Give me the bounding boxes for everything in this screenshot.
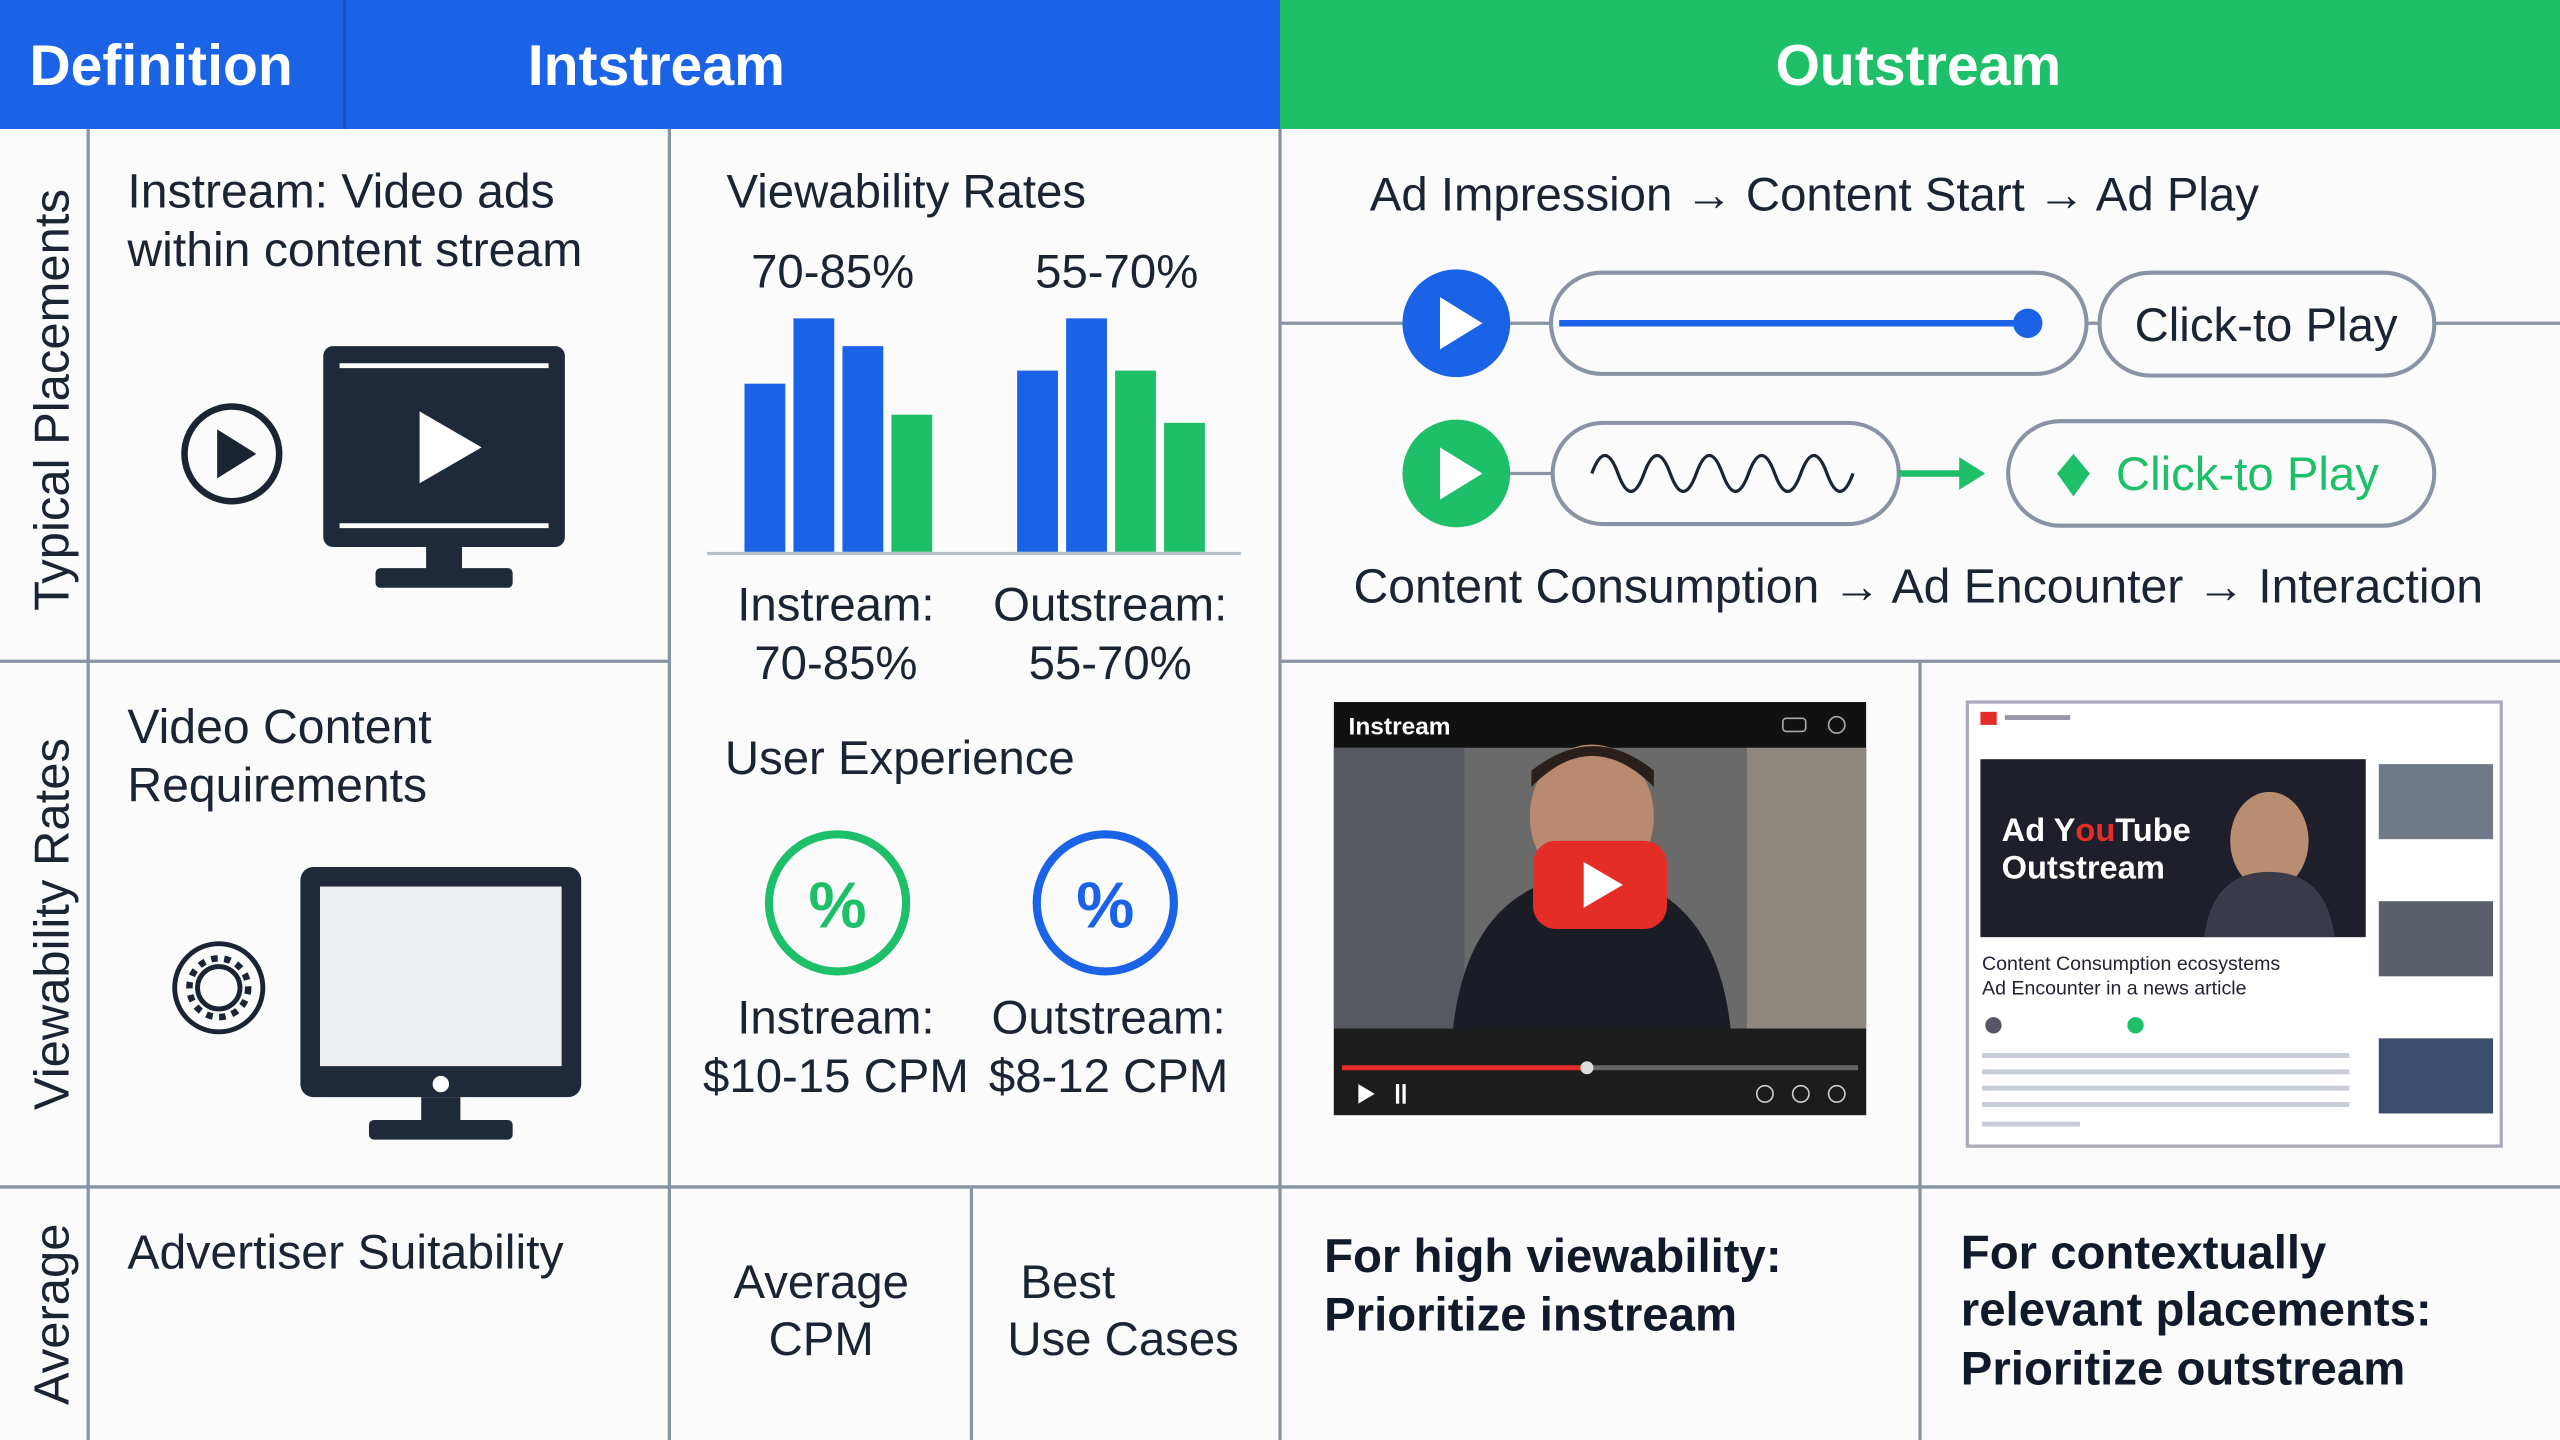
icon: monitor with play (323, 346, 565, 588)
row label: typical placements: Typical Placements (26, 189, 80, 611)
icon: green percent (769, 834, 906, 971)
flow diagram: outstream (1402, 420, 2434, 527)
row label: average: Average (26, 1224, 80, 1405)
mockup: outstream news page: Content Consumption ecosystems (1982, 953, 2280, 975)
text: instream definition: within content stream (126, 223, 582, 277)
mockup: instream video player (1334, 702, 1866, 1115)
text: advertiser suitability: Advertiser Suitability (127, 1226, 564, 1280)
text: cpm values: Instream: (737, 991, 935, 1044)
icon: gear (175, 944, 263, 1032)
icon: blue percent: % (1076, 868, 1134, 941)
header: instream (0, 0, 1280, 129)
text: cpm values: $10-15 CPM (703, 1050, 969, 1103)
header: outstream (1280, 0, 2560, 129)
text: outstream flow: Content Consumption → Ad Encounter → Interaction (1353, 559, 2483, 613)
heading: viewability rates: Viewability Rates (727, 165, 1086, 218)
icon: green percent: % (809, 868, 867, 941)
mockup: instream video player: Instream (1349, 714, 1451, 741)
bar chart: viewability: 55-70% (1029, 637, 1192, 690)
text: cpm values: Outstream: (992, 991, 1226, 1044)
text: best use cases: Best (1020, 1256, 1115, 1309)
bar chart: viewability: 70-85% (751, 245, 914, 298)
text: cpm values: $8-12 CPM (989, 1050, 1228, 1103)
text: instream definition: Instream: Video ads (127, 164, 555, 218)
header: instream: Intstream (528, 34, 785, 98)
mockup: outstream news page: Ad Encounter in a news article (1982, 977, 2247, 999)
mockup: outstream news page: Outstream (2002, 848, 2165, 885)
text: average cpm: Average (734, 1256, 909, 1309)
text: cpm values (703, 991, 1228, 1103)
icon: blue percent (1037, 834, 1174, 971)
bar chart: viewability: Instream: (737, 578, 935, 631)
bar chart: viewability: 70-85% (754, 637, 917, 690)
icon: blank monitor (300, 867, 581, 1140)
header: outstream: Outstream (1776, 34, 2061, 98)
text: outstream recommendation: relevant placements: (1961, 1284, 2432, 1337)
bar chart: viewability (707, 245, 1241, 690)
mockup: outstream news page (1967, 702, 2501, 1146)
flow diagram: outstream: Click-to Play (2116, 448, 2379, 501)
header: instream: Definition (29, 34, 293, 98)
text: instream recommendation: For high viewability: (1324, 1230, 1782, 1283)
text: instream flow: Ad Impression → Content Start → Ad Play (1370, 169, 2259, 222)
text: video content requirements: Video Content (127, 700, 432, 754)
flow diagram: instream: Click-to Play (2135, 299, 2398, 352)
heading: user experience: User Experience (725, 732, 1075, 785)
icon: play circle (184, 407, 279, 501)
text: outstream recommendation: For contextually (1961, 1227, 2326, 1280)
mockup: outstream news page: Ad YouTube (2002, 811, 2191, 848)
bar chart: viewability: Outstream: (993, 578, 1227, 631)
text: instream recommendation: Prioritize instream (1324, 1289, 1737, 1342)
text: best use cases: Use Cases (1007, 1313, 1239, 1366)
bar chart: viewability: 55-70% (1035, 245, 1198, 298)
text: average cpm: CPM (769, 1313, 874, 1366)
flow diagram: instream (1280, 269, 2560, 377)
text: video content requirements: Requirements (127, 759, 427, 813)
row label: viewability rates: Viewability Rates (26, 738, 80, 1110)
text: outstream recommendation: Prioritize outstream (1961, 1342, 2405, 1395)
